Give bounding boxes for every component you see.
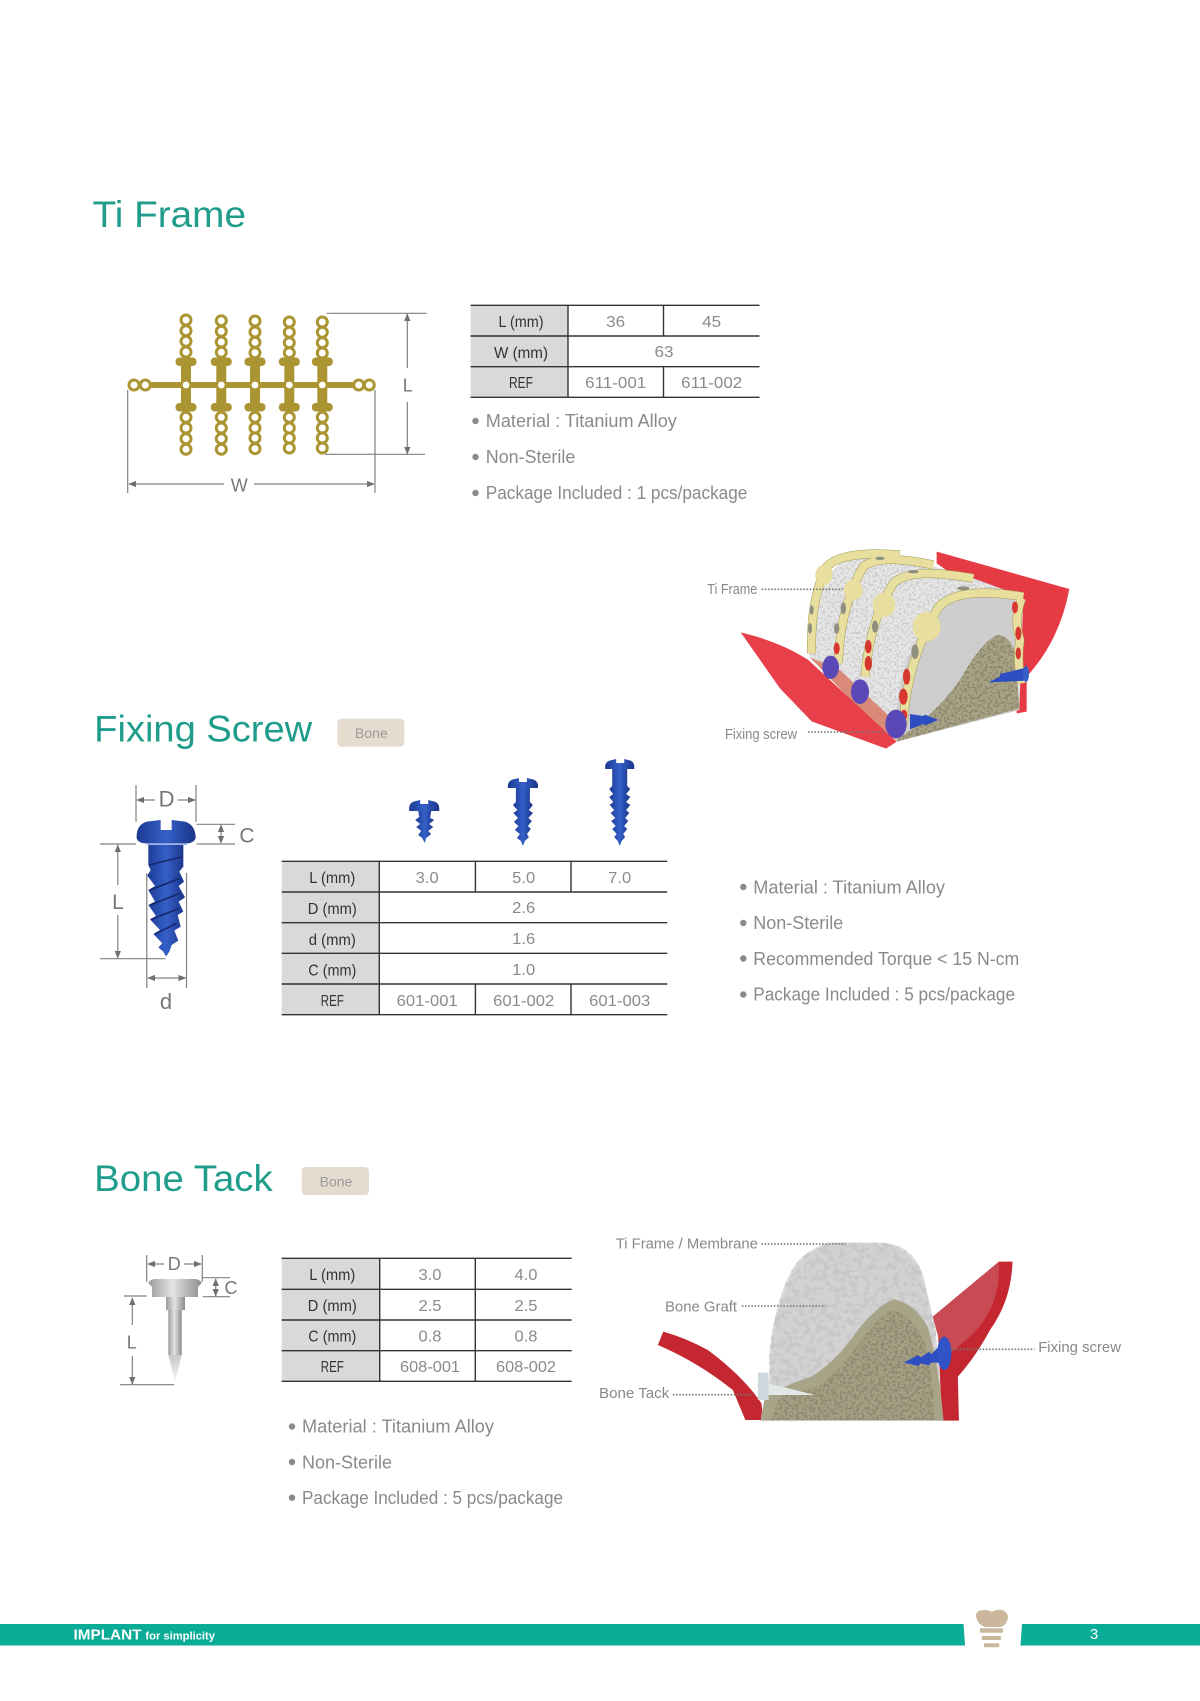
table: Fixing Screw sizes: C (mm) bbox=[308, 962, 356, 980]
table: Bone Tack sizes: D (mm) bbox=[308, 1298, 357, 1315]
table: Bone Tack sizes: 0.8 bbox=[418, 1329, 442, 1346]
diagram: fixing screw with dimensions: d bbox=[160, 989, 172, 1014]
table: Fixing Screw sizes: 601-002 bbox=[493, 993, 554, 1010]
table: Bone Tack sizes: 608-001 bbox=[400, 1359, 460, 1376]
brand line: IMPLANT bbox=[74, 1626, 142, 1643]
label: Fixing screw: Fixing screw bbox=[725, 726, 797, 743]
back gum flap bbox=[937, 552, 1069, 713]
bullet list: Bone Tack specs bbox=[289, 1417, 563, 1508]
table: Ti Frame sizes: 45 bbox=[702, 314, 721, 331]
titanium straps bbox=[812, 554, 1023, 723]
panel: Bone Tack bbox=[94, 1158, 572, 1508]
diagram: Ti frame mesh with dimensions bbox=[128, 313, 427, 496]
diagram: Ti frame mesh with dimensions: L bbox=[403, 376, 413, 396]
bullet list: Fixing Screw specs: Material : Titanium Alloy bbox=[753, 877, 945, 897]
footer band bbox=[0, 1610, 1200, 1647]
heading: Ti Frame: Ti Frame bbox=[92, 194, 246, 235]
table: Fixing Screw sizes: 5.0 bbox=[512, 870, 535, 887]
label: Fixing screw: Fixing screw bbox=[1038, 1339, 1121, 1356]
bone tack in section bbox=[769, 1383, 815, 1395]
page number: 3 bbox=[1090, 1626, 1098, 1643]
native cortical bone bbox=[761, 1299, 944, 1421]
table: Fixing Screw sizes: 601-001 bbox=[397, 993, 458, 1010]
table: Fixing Screw sizes: L (mm) bbox=[309, 870, 355, 887]
bullet list: Fixing Screw specs: Non-Sterile bbox=[753, 913, 843, 933]
panel: Ti Frame bbox=[92, 194, 760, 503]
heading: Fixing Screw: Fixing Screw bbox=[94, 709, 312, 750]
table: Fixing Screw sizes: 3.0 bbox=[416, 870, 439, 887]
diagram: fixing screw with dimensions: C bbox=[239, 825, 255, 848]
bullet list: Ti Frame specs: Package Included : 1 pcs/package bbox=[486, 483, 747, 503]
screws bbox=[910, 714, 938, 729]
tag: Bone: Bone bbox=[320, 1174, 353, 1190]
table: Bone Tack sizes: 3.0 bbox=[418, 1267, 442, 1284]
bone graft bbox=[761, 1243, 942, 1420]
bullet list: Bone Tack specs: Non-Sterile bbox=[302, 1452, 392, 1472]
table: Bone Tack sizes: 608-002 bbox=[496, 1359, 556, 1376]
label: Bone Tack: Bone Tack bbox=[599, 1385, 670, 1402]
illustration: jaw cross-section with graft, tack and screw bbox=[599, 1235, 1121, 1421]
bullet list: Ti Frame specs: Material : Titanium Alloy bbox=[486, 411, 677, 431]
diagram: fixing screw with dimensions: L bbox=[112, 891, 124, 914]
table: Fixing Screw sizes: 601-003 bbox=[589, 993, 650, 1010]
icon: dental implant bbox=[976, 1610, 1008, 1647]
table: Bone Tack sizes: REF bbox=[321, 1359, 344, 1376]
diagram: bone tack with dimensions: D bbox=[168, 1254, 181, 1274]
diagram: bone tack with dimensions bbox=[120, 1254, 238, 1385]
front gum flap bbox=[741, 632, 897, 749]
bullet list: Bone Tack specs: Package Included : 5 pcs/package bbox=[302, 1488, 563, 1508]
tag: Bone bbox=[302, 1167, 369, 1195]
table: Fixing Screw sizes: 1.6 bbox=[512, 931, 535, 948]
bullet list: Fixing Screw specs: Package Included : 5 pcs/package bbox=[753, 985, 1015, 1005]
table: Bone Tack sizes: L (mm) bbox=[309, 1267, 355, 1284]
table: Bone Tack sizes bbox=[282, 1258, 572, 1381]
brand line: for simplicity bbox=[145, 1630, 216, 1642]
table: Bone Tack sizes: 0.8 bbox=[514, 1329, 538, 1346]
bone graft body bbox=[809, 552, 1023, 742]
diagram: fixing screw with dimensions: D bbox=[159, 787, 175, 812]
table: Ti Frame sizes: REF bbox=[509, 375, 533, 392]
tag: Bone: Bone bbox=[355, 725, 388, 741]
bullet list: Bone Tack specs: Material : Titanium Alloy bbox=[302, 1417, 494, 1437]
panel: Fixing Screw bbox=[94, 709, 1019, 1015]
table: Ti Frame sizes: 611-002 bbox=[681, 375, 742, 392]
diagram: bone tack with dimensions: C bbox=[224, 1278, 238, 1298]
diagram: fixing screw with dimensions bbox=[100, 785, 255, 1014]
bullet list: Ti Frame specs: Non-Sterile bbox=[486, 447, 575, 467]
table: Fixing Screw sizes: d (mm) bbox=[309, 932, 356, 949]
table: Fixing Screw sizes: 2.6 bbox=[512, 900, 535, 917]
gum base under the screws bbox=[810, 657, 897, 740]
table: Fixing Screw sizes: REF bbox=[321, 993, 344, 1010]
table: Fixing Screw sizes: 1.0 bbox=[512, 962, 535, 979]
table: Ti Frame sizes bbox=[471, 305, 760, 397]
label: Ti Frame / Membrane: Ti Frame / Membrane bbox=[616, 1235, 758, 1252]
table: Ti Frame sizes: 611-001 bbox=[585, 375, 646, 392]
left gum flap bbox=[658, 1332, 763, 1420]
tag: Bone bbox=[337, 719, 404, 747]
table: Bone Tack sizes: C (mm) bbox=[308, 1329, 356, 1346]
diagram: bone tack with dimensions: L bbox=[127, 1332, 137, 1352]
trabecular bone bbox=[770, 1311, 935, 1420]
brand line bbox=[74, 1626, 216, 1643]
table: Ti Frame sizes: 36 bbox=[606, 314, 625, 331]
illustration: Ti frame fixed on bone graft, 3D view bbox=[707, 552, 1069, 749]
right gum flap bbox=[933, 1262, 1012, 1421]
table: Ti Frame sizes: 63 bbox=[654, 344, 674, 361]
table: Bone Tack sizes: 2.5 bbox=[418, 1298, 442, 1315]
diagram: Ti frame mesh with dimensions: W bbox=[231, 476, 248, 496]
label: Ti Frame: Ti Frame bbox=[707, 581, 757, 598]
table: Bone Tack sizes: 2.5 bbox=[514, 1298, 538, 1315]
bullet list: Ti Frame specs bbox=[472, 411, 747, 503]
table: Fixing Screw sizes bbox=[282, 861, 667, 1015]
bullet list: Fixing Screw specs: Recommended Torque < 15 N-cm bbox=[753, 949, 1019, 969]
native bone section bbox=[897, 635, 1019, 742]
table: Ti Frame sizes: L (mm) bbox=[498, 314, 544, 331]
front section of graft bbox=[896, 592, 1019, 742]
table: Fixing Screw sizes: 7.0 bbox=[608, 870, 631, 887]
table: Ti Frame sizes: W (mm) bbox=[494, 345, 548, 362]
table: Fixing Screw sizes: D (mm) bbox=[308, 901, 357, 918]
screw lengths: 3.0, 5.0, 7.0 bbox=[409, 759, 634, 846]
label: Bone Graft: Bone Graft bbox=[665, 1299, 738, 1316]
fixing screw in section bbox=[904, 1344, 942, 1366]
table: Bone Tack sizes: 4.0 bbox=[514, 1267, 538, 1284]
bullet list: Fixing Screw specs bbox=[740, 877, 1019, 1005]
heading: Bone Tack: Bone Tack bbox=[94, 1158, 273, 1199]
